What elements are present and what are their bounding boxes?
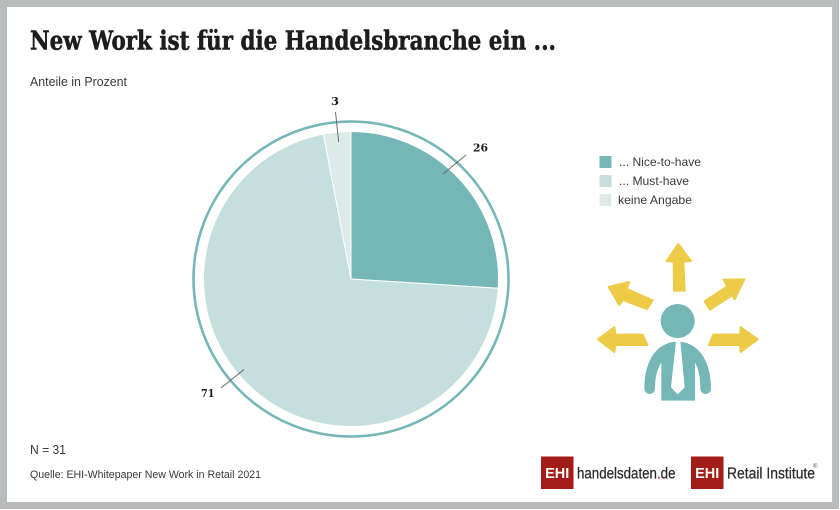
label: 71: 71 <box>201 386 214 400</box>
head <box>661 304 695 338</box>
arrows <box>598 244 758 352</box>
tie <box>671 341 685 394</box>
legend item: Nice-to-have: ... Nice-to-have <box>619 155 701 169</box>
logo: EHI handelsdaten.de <box>541 456 676 489</box>
slice: Nice-to-have 26 <box>351 132 498 288</box>
sample size: N = 31 <box>30 443 66 457</box>
logo: EHI Retail Institute <box>691 456 818 489</box>
body <box>644 342 711 401</box>
label: 3 <box>331 94 339 142</box>
subtitle: Anteile in Prozent <box>30 75 128 89</box>
label: 26: 26 <box>473 140 488 154</box>
legend <box>600 155 701 207</box>
label: 3: 3 <box>331 94 339 108</box>
chart ring <box>194 122 508 436</box>
logo: EHI Retail Institute: ® <box>813 463 818 470</box>
title: New Work ist für die Handelsbranche ein ... <box>30 26 556 56</box>
label: 71 <box>201 370 244 400</box>
logo: EHI handelsdaten.de: handelsdaten.de <box>577 466 676 482</box>
slice: Must-have 71 <box>203 134 498 426</box>
icon: person with five arrows <box>598 244 758 401</box>
legend item: Must-have: ... Must-have <box>619 174 689 188</box>
label: 26 <box>443 140 488 174</box>
logo: EHI Retail Institute: EHI <box>695 466 719 482</box>
source: Quelle: EHI-Whitepaper New Work in Retail 2021 <box>30 469 261 481</box>
pie chart <box>194 122 508 436</box>
logo: EHI Retail Institute: Retail Institute <box>727 466 815 482</box>
logo: EHI handelsdaten.de: EHI <box>545 466 569 482</box>
slice: keine Angabe 3 <box>323 132 351 279</box>
legend item: keine Angabe: keine Angabe <box>618 193 692 207</box>
